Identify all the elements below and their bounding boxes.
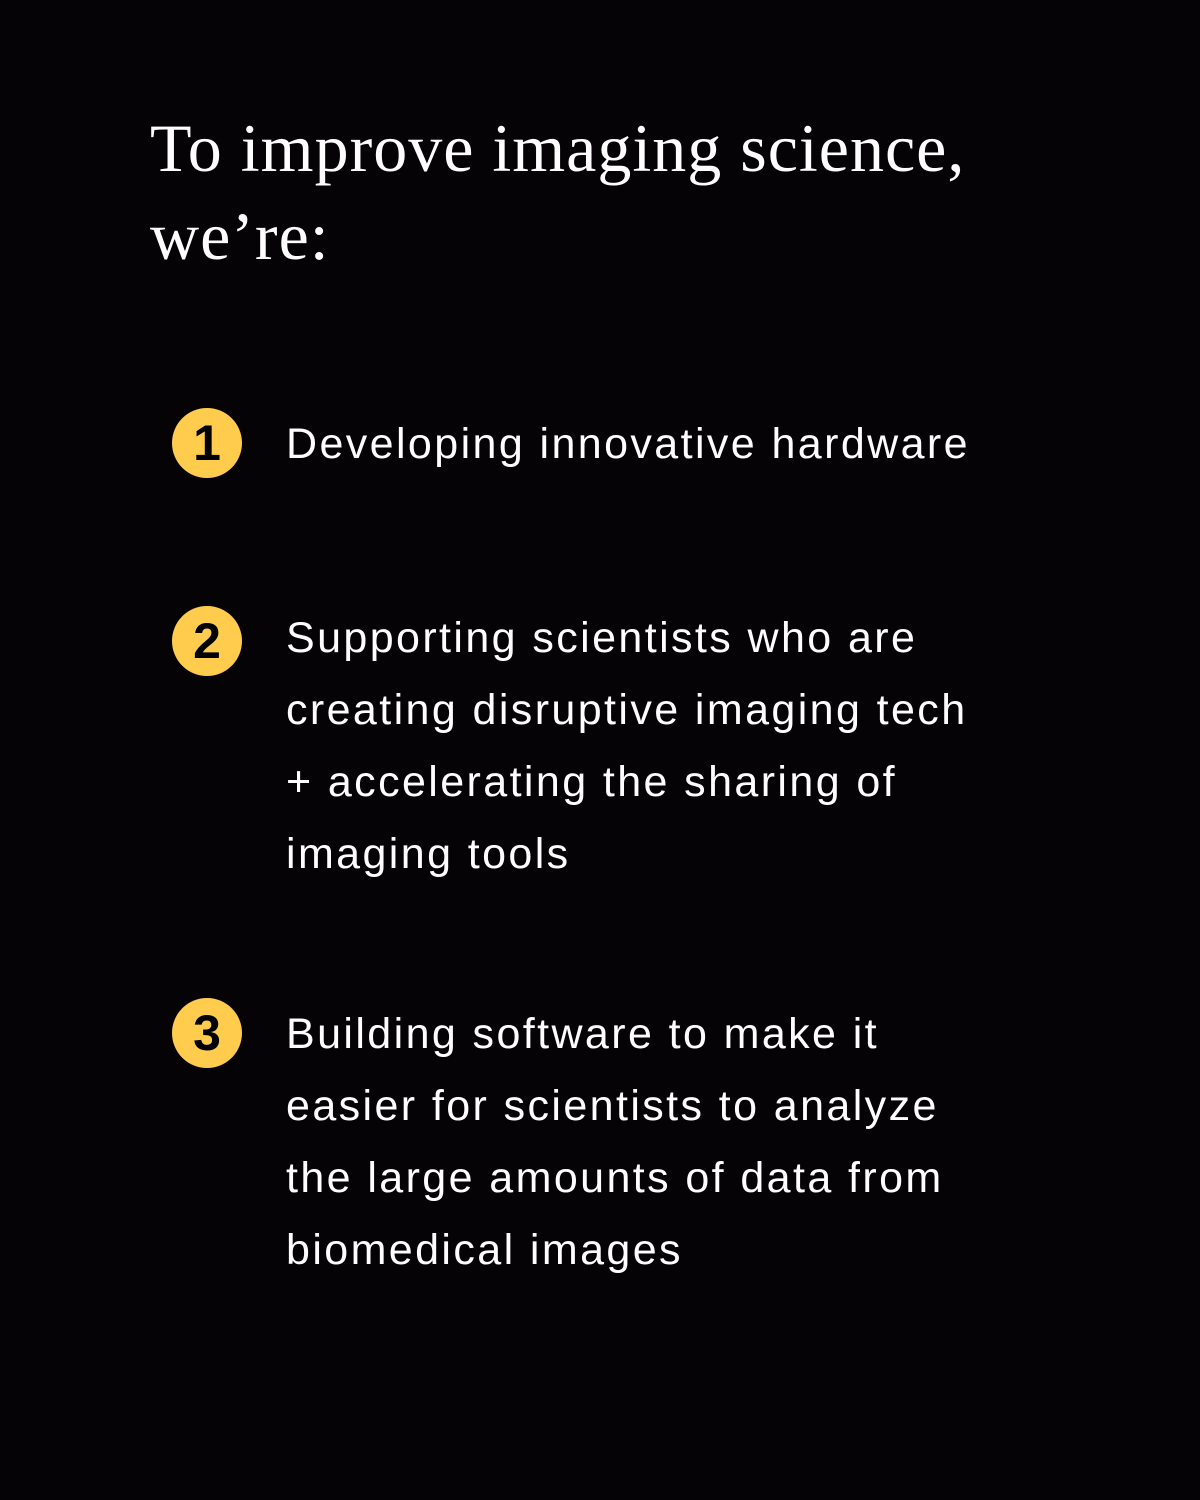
icon: number 2: 2 <box>193 613 221 669</box>
text: item 3: biomedical images <box>286 1226 683 1274</box>
icon: number 1: 1 <box>193 415 221 471</box>
title: we’re: <box>150 198 330 274</box>
item 2 <box>172 606 968 878</box>
text: item 2 <box>286 614 968 878</box>
text: item 1: Developing innovative hardware <box>286 420 970 468</box>
text: item 2: + accelerating the sharing of <box>286 758 897 806</box>
text: item 2: Supporting scientists who are <box>286 614 917 662</box>
text: item 3: Building software to make it <box>286 1010 879 1058</box>
icon: number 2 <box>172 606 242 676</box>
text: item 2: imaging tools <box>286 830 571 878</box>
title: To improve imaging science, <box>150 110 965 186</box>
text: item 3: easier for scientists to analyze <box>286 1082 939 1130</box>
text: item 3 <box>286 1010 944 1274</box>
text: item 3: the large amounts of data from <box>286 1154 944 1202</box>
icon: number 3: 3 <box>193 1005 221 1061</box>
item 3 <box>172 998 944 1274</box>
icon: number 1 <box>172 408 242 478</box>
text: item 2: creating disruptive imaging tech <box>286 686 968 734</box>
icon: number 3 <box>172 998 242 1068</box>
item 1 <box>172 408 970 478</box>
title <box>150 110 965 274</box>
